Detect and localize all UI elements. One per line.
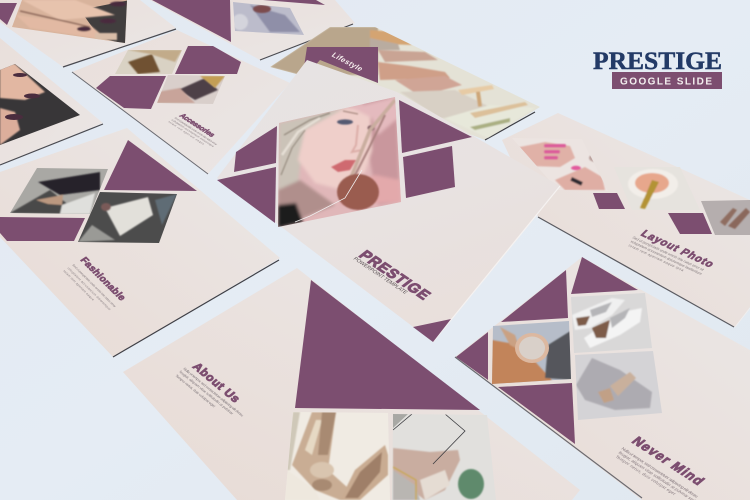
slide: fashionable [0,128,280,357]
slide: top centre [150,0,355,60]
photo: jewellery and belt [157,75,225,104]
layout photo title: Layout Photo [638,228,717,270]
face [298,108,372,190]
purple triangles [456,257,638,444]
purple triangle [399,100,472,153]
slide: about us [123,268,580,500]
purple block [96,76,166,109]
photo: boot and plant [390,412,498,500]
slide: layout photo [502,113,750,327]
accessories body text: totam rem aperiam eaque [167,120,206,146]
photo: studded bag [10,168,108,214]
purple block [593,193,625,209]
logo: prestige google slide [593,48,722,89]
accessories body text: Sed ut perspiciatis unde omnis iste natus error [173,116,219,146]
photo: white clutch [78,192,177,243]
layout photo body text: totam rem aperiam eaque ipsa [627,244,685,272]
logo badge: GOOGLE SLIDE [620,76,712,88]
purple shape [234,126,277,172]
slide: lifestyle [270,27,540,140]
fashionable body text: totam rem aperiam eaque [62,269,95,301]
about us body text: feugiat, aliquam vitae sollicitudin at pulvinar [178,370,235,416]
photo: white heels [570,292,655,354]
purple band [0,217,85,241]
purple block [668,213,712,234]
photo: wrist watch [492,321,571,384]
purple triangle [295,280,480,410]
photo: cream bowl [628,167,680,210]
accessories title: Accessories [177,112,218,138]
about us body text: Nulla ut tempor, sed consectetuer adipiscing elit donec [182,367,244,418]
layout photo body text: voluptatem accusantium doloremque laudantium [629,240,703,276]
photo: grey bag [573,350,665,422]
never mind body text: Tempor netus, duis volutpat eget [614,454,678,496]
purple block [175,46,241,74]
purple corner [413,319,451,342]
lifestyle banner [302,47,378,83]
never mind body text: Nulla ut tempor, sed consectetuer adipiscing elit donec [620,446,700,499]
fashionable title: Fashionable [77,256,128,303]
lifestyle title: Lifestyle [330,51,365,73]
never mind title: Never Mind [629,434,708,488]
slide: nails left [0,38,103,165]
slide: nails top left [0,0,176,67]
fashionable body text: voluptatem accusantium doloremque [66,266,112,311]
about us body text: Tempor netus, duis volutpat eget [174,374,216,408]
cover subtitle: POWERPOINT TEMPLATE [351,256,409,296]
photo: painted nails [520,142,606,190]
accessories body text: voluptatem accusantium doloremque [170,118,216,148]
about us title: About Us [190,361,242,405]
photo: jewellery box [115,50,182,74]
layout photo body text: Sed ut perspiciatis unde omnis iste natus error sit [631,236,705,272]
photo: clothes on rack [270,27,535,138]
slide: central prestige cover [217,60,560,342]
photo: brushes [701,200,750,235]
purple triangle [104,140,197,191]
slide: never mind [455,257,750,500]
photo: beige heels [283,410,393,500]
slide: accessories [72,30,290,174]
purple square [403,146,455,198]
purple triangle [217,167,276,223]
cover title: PRESTIGE [355,248,433,303]
fashionable body text: Sed ut perspiciatis unde omnis iste natus error [71,263,118,309]
photo: portrait [275,95,405,230]
logo wordmark: PRESTIGE [593,48,722,75]
hair [278,110,340,189]
